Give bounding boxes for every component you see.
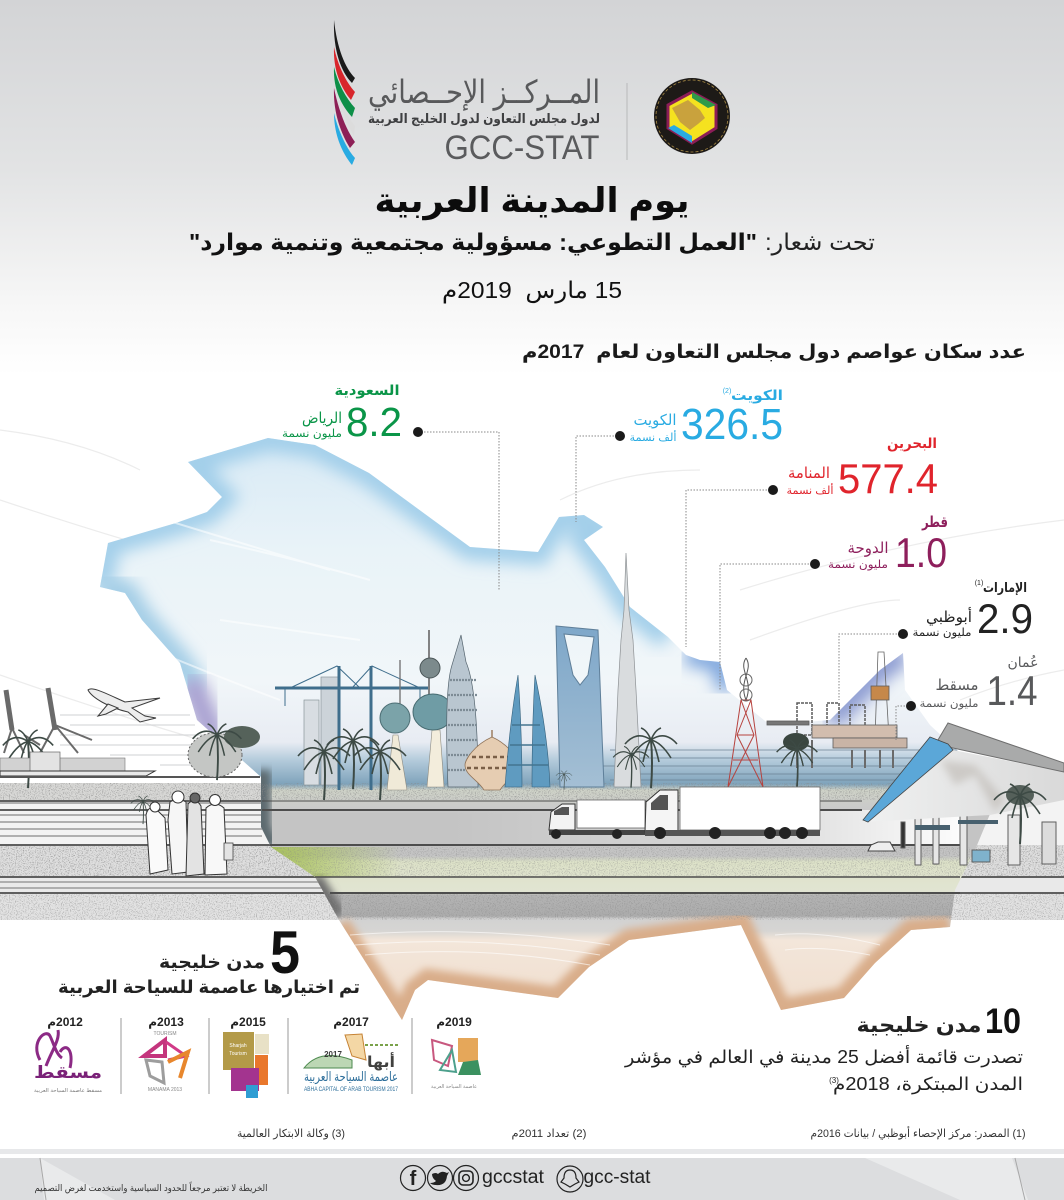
logo years row [47, 1015, 472, 1094]
footnotes: (3) وكالة الابتكار العالمية [237, 1128, 345, 1140]
logo years row: 2013م [148, 1015, 184, 1030]
logo: Sharjah 2015: Tourism [229, 1051, 247, 1057]
callout: Bahrain: ألف نسمة [786, 483, 834, 497]
skyline illustration [275, 553, 907, 800]
icons: social media: f [410, 1168, 417, 1190]
canopy underside [863, 750, 1064, 822]
callout: Bahrain: المنامة [788, 465, 830, 482]
rig palm [777, 733, 817, 786]
callout: Saudi Arabia: الرياض [302, 410, 342, 427]
large palm [188, 724, 260, 780]
callout: Kuwait: (2) [723, 388, 731, 395]
logo GCC-STAT wordmark: GCC-STAT [444, 129, 600, 167]
text block: 5 tourism capitals: 5 [270, 919, 300, 986]
logo years row: 2012م [47, 1015, 83, 1030]
callout: UAE: مليون نسمة [912, 627, 972, 639]
divider in logo [626, 83, 628, 160]
callout: Saudi Arabia [282, 382, 499, 590]
water tower dome [465, 730, 518, 790]
left port illustration [0, 688, 260, 824]
palm behind people [131, 796, 155, 824]
logo: Muscat 2012: مسقط [34, 1063, 102, 1082]
Kingdom Tower [556, 626, 604, 787]
logo: Sharjah 2015 [223, 1032, 269, 1098]
logo: Abha 2017 [304, 1034, 399, 1093]
text block: 10 innovative cities: تصدرت قائمة أفضل 25 مدينة في العالم في مؤشر [624, 1045, 1023, 1068]
text block: 5 tourism capitals: تم اختيارها عاصمة للسياحة العربية [58, 977, 360, 998]
Burj Khalifa [614, 553, 641, 787]
palm trees [298, 728, 817, 800]
callout: Qatar: 1.0 [895, 529, 947, 576]
logo: 2019 [431, 1038, 481, 1090]
canopy blue fascia [863, 737, 953, 822]
disclaimer: الخريطة لا تعتبر مرجعاً للحدود السياسية واستخدمت لغرض التصميم [34, 1181, 268, 1194]
subtitle: تحت شعار: [765, 229, 875, 256]
callout: Oman: مسقط [936, 677, 978, 694]
logo years row: 2019م [436, 1015, 472, 1030]
car [868, 842, 895, 851]
footnotes: (1) المصدر: مركز الإحصاء أبوظبي / بيانات 2016م [810, 1126, 1026, 1140]
map road fade [576, 810, 960, 844]
callout: Kuwait: 326.5 [681, 400, 783, 449]
callout: Bahrain: 577.4 [838, 455, 938, 502]
telecom tower [728, 658, 763, 787]
canopy roof [935, 723, 1064, 772]
callout: Oman [896, 654, 1038, 740]
callout: Saudi Arabia: السعودية [334, 382, 400, 399]
logo: Manama 2013 [144, 1031, 188, 1093]
text block: 10 innovative cities: 10 [985, 1002, 1021, 1041]
logo: Abha 2017: أبها [367, 1052, 395, 1071]
heading: capitals population: عدد سكان عواصم دول مجلس التعاون لعام 2017م [522, 342, 1026, 363]
logo ribbons [334, 20, 355, 165]
oil rig [767, 652, 907, 768]
callout: Bahrain: البحرين [887, 435, 937, 452]
fuel station [863, 723, 1064, 865]
callout: Kuwait: ألف نسمة [630, 430, 676, 444]
subtitle: "العمل التطوعي: مسؤولية مجتمعية وتنمية موارد" [189, 229, 757, 256]
road lines across map [262, 801, 960, 893]
people in traditional dress [146, 791, 233, 876]
Al Hamra tower [447, 635, 478, 787]
icon: GCC seal [654, 78, 730, 154]
logo: Muscat 2012: مسقط عاصمة السياحة العربية [34, 1088, 102, 1094]
callout: Qatar [720, 514, 948, 690]
callout: Oman: مليون نسمة [920, 698, 979, 710]
logo: 2019: عاصمة السياحة العربية [431, 1084, 477, 1090]
quay palm [3, 730, 53, 788]
map watercolor edges [100, 438, 950, 1020]
logo: Abha 2017: عاصمة السياحة العربية [304, 1069, 398, 1085]
icon: snapchat [557, 1166, 583, 1192]
callout: Qatar: مليون نسمة [828, 559, 888, 571]
logo: Sharjah 2015: Sharjah [229, 1043, 247, 1049]
logo: Muscat 2012 [34, 1030, 102, 1094]
callout: Qatar: قطر [921, 514, 948, 531]
cargo ship [0, 752, 260, 777]
canopy stain [940, 760, 1005, 812]
callout: Kuwait [576, 387, 783, 522]
logo: Abha 2017: 2017 [324, 1050, 342, 1059]
logo years row: 2015م [230, 1015, 266, 1030]
plane [88, 689, 160, 722]
map of the Gulf states [90, 430, 1010, 1030]
callout: Saudi Arabia: 8.2 [346, 399, 402, 445]
background sketched ground [0, 430, 1064, 920]
footer strip [0, 1149, 1064, 1154]
station small roofs [915, 820, 998, 830]
logo: GCC-STAT [334, 20, 600, 167]
footnotes [237, 1126, 1026, 1140]
callout: Oman: عُمان [1008, 654, 1038, 670]
callout: Bahrain [686, 435, 938, 647]
front truck [645, 787, 820, 839]
callout: UAE: (1) [975, 580, 983, 587]
text block: 10 innovative cities: (3) [829, 1076, 839, 1085]
footnotes: (2) تعداد 2011م [511, 1128, 586, 1140]
text block: 10 innovative cities [624, 1002, 1023, 1095]
station palm [994, 784, 1046, 844]
icons: social media [400, 1166, 478, 1190]
Kuwait towers [380, 630, 453, 790]
gccstat handle: gccstat [482, 1167, 545, 1188]
date: 15 مارس 2019م [442, 277, 622, 304]
Bahrain World Trade Center [505, 675, 550, 787]
logo: Manama 2013: MANAMA 2013 [148, 1087, 182, 1093]
title: يوم المدينة العربية [374, 182, 690, 221]
logo: Abha 2017: ABHA CAPITAL OF ARAB TOURISM 2017 [304, 1087, 399, 1093]
callout: Qatar: الدوحة [848, 540, 888, 557]
callout: Kuwait: الكويت [634, 412, 676, 429]
text block: 5 tourism capitals: مدن خليجية [159, 952, 265, 972]
logo subtitle: لدول مجلس التعاون لدول الخليج العربية [368, 111, 600, 126]
logo years row: 2017م [333, 1015, 369, 1030]
crane [275, 666, 428, 790]
gcc-stat handle: gcc-stat [584, 1167, 651, 1188]
callout: UAE: الإمارات [983, 580, 1027, 595]
logo: Manama 2013: TOURISM [154, 1031, 176, 1037]
text block: 10 innovative cities: المدن المبتكرة، 2018م [833, 1074, 1023, 1095]
text block: 5 tourism capitals [58, 919, 360, 998]
footer panel [0, 1158, 1064, 1200]
trucks [549, 787, 820, 839]
callout: UAE: أبوظبي [926, 607, 972, 627]
callout: Saudi Arabia: مليون نسمة [282, 428, 342, 440]
rear truck [549, 800, 645, 839]
callout: Kuwait: الكويت [731, 387, 783, 404]
callout: UAE [839, 580, 1033, 700]
port cranes [4, 688, 92, 753]
text block: 10 innovative cities: مدن خليجية [856, 1014, 982, 1037]
logo Arabic name: المــركــز الإحــصائي [368, 74, 600, 111]
callout: Oman: 1.4 [986, 667, 1038, 714]
callout: UAE: 2.9 [977, 595, 1033, 642]
pumps and columns [901, 805, 1056, 865]
